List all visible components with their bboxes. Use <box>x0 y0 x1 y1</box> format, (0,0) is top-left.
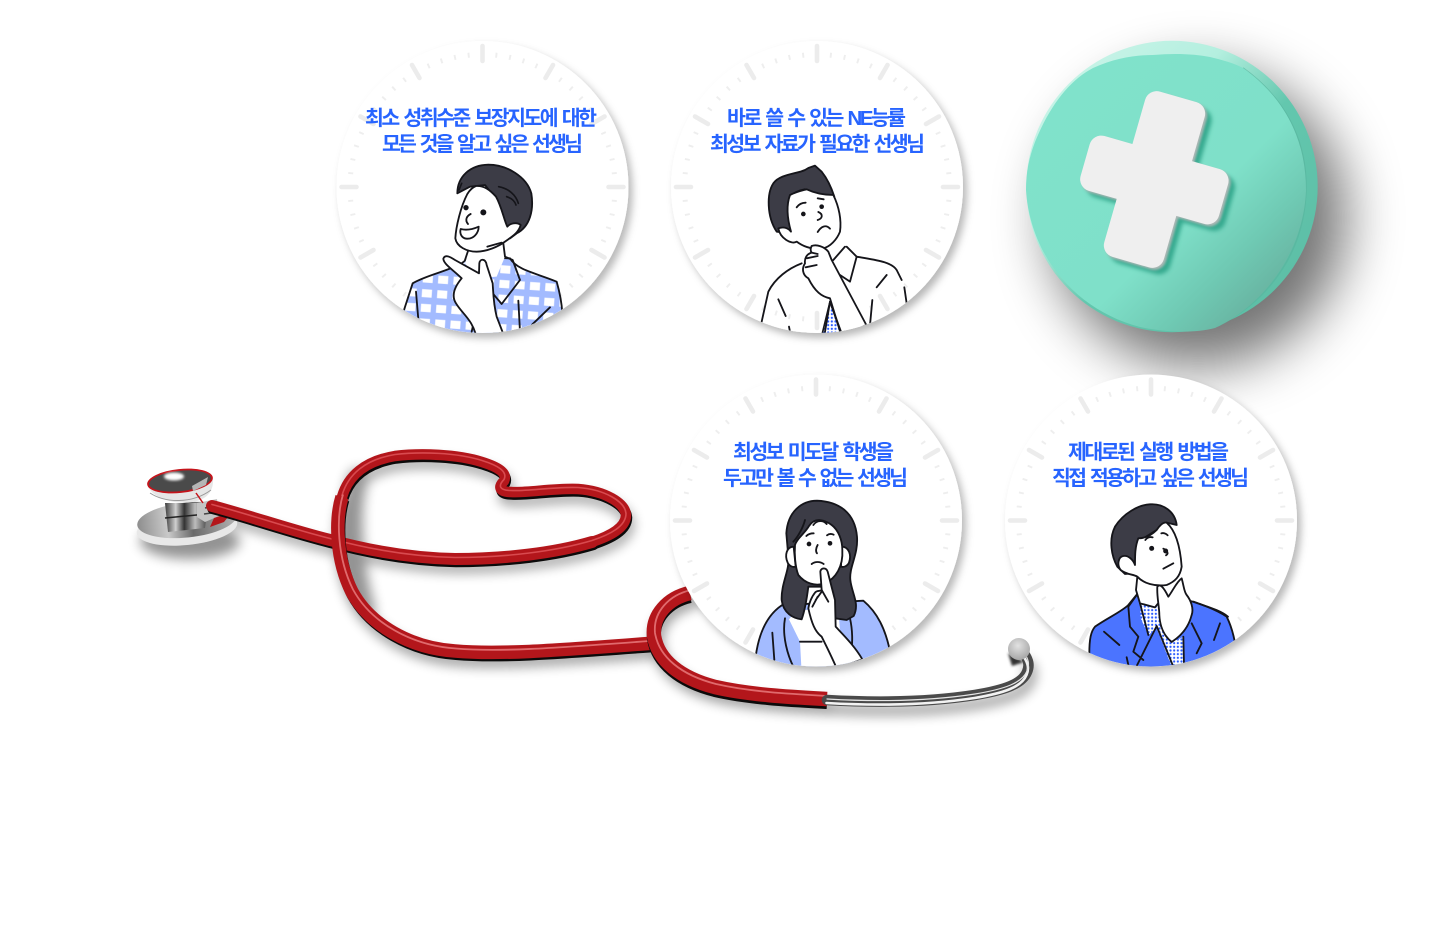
badge rim <box>1026 41 1318 332</box>
person in shirt and tie, hand on chin <box>762 166 907 337</box>
tube: chestpiece around the heart <box>212 453 627 562</box>
tube: yoke branches <box>654 590 828 702</box>
panel: clock card 2 <box>671 41 963 337</box>
cross underside <box>1064 79 1249 284</box>
caption 2: 바로 쓸 수 있는 NE능률 <box>727 107 906 130</box>
panel: clock card 4 <box>1005 374 1297 670</box>
caption 1: 최소 성취수준 보장지도에 대한 <box>365 107 597 130</box>
stethoscope <box>135 453 1031 711</box>
caption 1 <box>365 107 597 156</box>
caption 3 <box>723 441 908 490</box>
badge edge line <box>1218 68 1306 326</box>
badge face <box>1026 54 1306 332</box>
caption 1: 모든 것을 알고 싶은 선생님 <box>382 133 583 156</box>
infographic canvas <box>134 32 1384 723</box>
white cross <box>1062 77 1247 282</box>
metal ear tube <box>826 654 1028 705</box>
tube: heart left side sweeping to yoke <box>338 494 656 655</box>
caption 4: 제대로된 실행 방법을 <box>1068 441 1229 464</box>
cross shadow <box>1068 83 1254 289</box>
panel: clock card 1 <box>336 41 628 340</box>
badge drop shadow <box>1050 70 1346 366</box>
chestpiece <box>135 466 239 550</box>
caption 4 <box>1052 441 1249 490</box>
caption 2: 최성보 자료가 필요한 선생님 <box>710 133 925 156</box>
person in blue suit, hand on chin <box>1089 504 1235 670</box>
stethoscope floor shadow <box>140 463 1031 711</box>
ear tip <box>1008 638 1030 666</box>
caption 3: 최성보 미도달 학생을 <box>733 441 894 464</box>
caption 2 <box>710 107 925 156</box>
icon: teal medical cross badge <box>1026 41 1318 332</box>
person with long hair, finger on lips <box>756 501 889 673</box>
person with checked shirt pointing at chin <box>404 165 563 340</box>
panel: clock card 3 <box>670 374 962 673</box>
caption 4: 직접 적용하고 싶은 선생님 <box>1052 467 1249 490</box>
caption 3: 두고만 볼 수 없는 선생님 <box>723 467 908 490</box>
